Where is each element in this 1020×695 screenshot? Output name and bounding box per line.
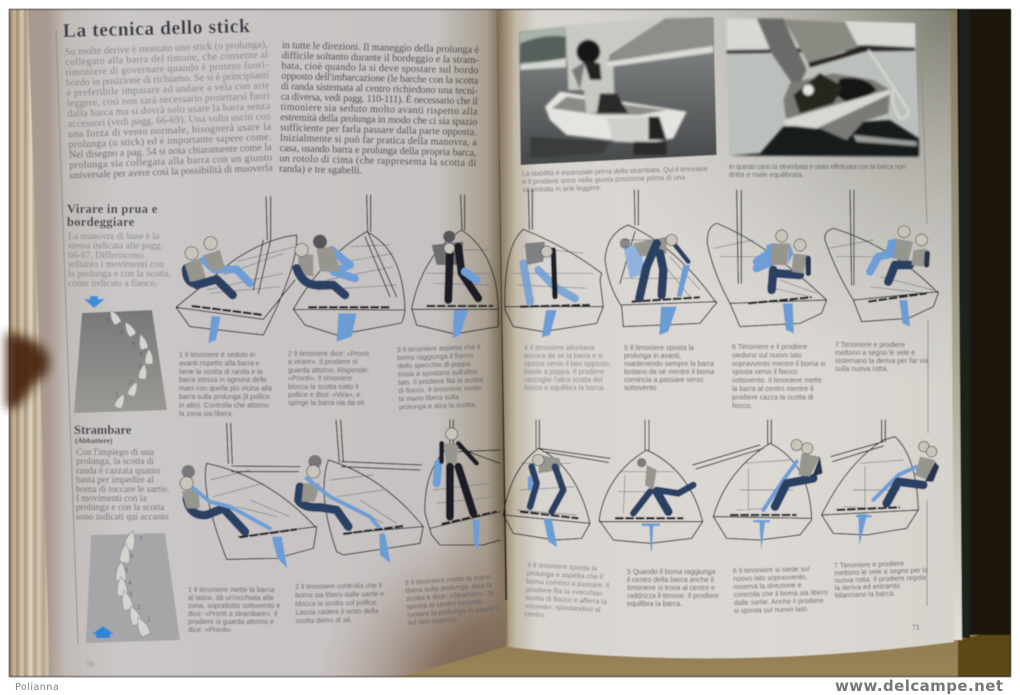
caption 3 lower: [405, 574, 500, 627]
caption 5 lower: timoniere si trova al centro e: [627, 585, 715, 592]
boat 3 lower left: [425, 420, 500, 551]
caption 5 lower: 5 Quando il boma raggiunga: [627, 569, 715, 576]
caption 1: [179, 352, 272, 418]
boat 6 lower right: [693, 420, 823, 551]
caption 6 lower: dalle sartie. Anche il prodiere: [734, 598, 824, 607]
caption 1 lower: [188, 587, 280, 634]
caption 6: sottovento. Il timoniere mette: [732, 378, 822, 385]
text block: virare: come indicato a fianco.: [68, 278, 158, 289]
text block: virare: la prolunga e con la scotta,: [68, 269, 171, 280]
caption 2 lower: 2 Il timoniere controlla che il: [295, 582, 382, 591]
photo 1 caption: strambata in arie leggere.: [522, 185, 602, 194]
boat 4 lower right: [503, 420, 610, 547]
photo 2: [726, 18, 919, 157]
caption 1: 1 Il timoniere è seduto in: [179, 352, 255, 359]
heading: Strambare: (Abbattere): [75, 436, 113, 445]
caption 3 lower: scotta e dice: «Strambo». Si: [406, 590, 494, 603]
gybe boats: 5: [125, 568, 129, 574]
caption 3: [397, 344, 484, 411]
photo 1: [519, 17, 717, 165]
caption 5: 5 Il timoniere sposta la: [624, 345, 694, 352]
title: La tecnica dello stick: [63, 16, 250, 42]
boat 6 top right: [707, 190, 827, 333]
caption 4: fiocco e equilibra la barca.: [524, 385, 605, 392]
text block: intro column 2: in tutte le direzioni. Il maneggio della prolunga è: [282, 40, 480, 56]
caption 5 lower: [627, 569, 719, 608]
caption 5: mantenendo sempre la barra: [624, 361, 714, 368]
diagram: tacking course: [74, 296, 167, 413]
tack boats: 1: [115, 393, 119, 399]
caption 2: pollice e dice: «Vira», e: [288, 392, 360, 399]
tack boats: [106, 308, 153, 409]
text block: strambare: boma di toccare le sartie.: [76, 485, 169, 495]
caption 3: dello specchio di poppa.: [397, 361, 473, 370]
caption 3 lower: ruotare la prolunga in avanti e: [407, 605, 500, 619]
text block: strambare: Con l'impiego di una: [76, 448, 154, 458]
caption 2 lower: blocca la scotta col pollice.: [295, 600, 378, 608]
text block: intro column 1: collegato alla barra del timone, che consente al: [65, 49, 269, 68]
icon: wind arrow down: [84, 296, 105, 308]
caption 2 lower: scotta dietro di sé.: [296, 617, 352, 625]
caption 6: sopravvento mentre il boma si: [732, 361, 826, 368]
caption 2: [288, 351, 369, 407]
diagram: gybing course: [86, 529, 180, 643]
text block: intro column 1: Nel disegno a pag. 54 si nota chiaramente come la: [69, 142, 272, 161]
caption 1: la zona sia libera.: [179, 411, 234, 418]
text block: virare: stessa indicata alle pagg.: [68, 240, 163, 251]
caption 2: a virare». Il prodiere si: [288, 359, 358, 366]
text block: intro column 2: un rotolo di cima (che rappresenta la scotta di: [279, 153, 477, 169]
text block: intro column 2: di randa sistemata al centro richiedono una tecni-: [281, 81, 479, 97]
caption 6 lower: nuovo lato sopravvento,: [733, 574, 808, 583]
caption 5: [624, 345, 714, 392]
caption 4 lower: boma cominci a passare. Il: [526, 578, 610, 590]
caption 5: sottovento.: [624, 385, 658, 392]
caption 7: sistemano la deriva per far via: [835, 358, 928, 365]
left page shading: [28, 10, 506, 676]
caption 3: 3 Il timoniere aspetta che il: [397, 344, 481, 354]
gybe boats: 7: [139, 537, 143, 543]
caption 7: [835, 342, 928, 373]
boat 2 top left: [293, 195, 405, 342]
text block: intro column 2: estremità della prolunga in modo che ci sia spazio: [280, 112, 477, 128]
text block: intro column 1: timoniere di governare quando è proteso fuori-: [65, 60, 269, 79]
left page margin rule: [56, 30, 78, 643]
gybe boats: [116, 529, 151, 637]
text block: intro column 2: bata, cioè quando la si deve spostare sul bordo: [281, 61, 479, 76]
caption 6 lower: si sposta sul nuovo lato.: [734, 606, 809, 615]
caption 2: guarda attorno. Risponde:: [288, 367, 369, 374]
text block: intro column 1: accessori (vedi pagg. 66-69). Una volta usciti con: [67, 111, 271, 130]
caption 1 lower: al lasco, dà un'occhiata alla: [188, 595, 273, 602]
caption 6: 6 Timoniere e il prodiere: [732, 344, 807, 351]
caption 6 lower: 6 Il timoniere si siede sul: [733, 566, 810, 575]
caption 2: spinge la barra via da sé.: [288, 400, 366, 407]
caption 2 lower: Lascia cadere il resto della: [295, 608, 378, 616]
caption 3: lato. Il prodiere fila la scotta: [398, 377, 483, 387]
caption 3 lower: sul lato opposto.: [407, 616, 459, 627]
caption 2: «Pronti». Il timoniere: [288, 376, 352, 383]
text block: intro column 2: timoniere sia seduto molto avanti rispetto alla: [280, 102, 478, 118]
page number 71: 71: [912, 623, 920, 632]
caption 4 lower: «nuova», spostandosi al: [525, 603, 601, 614]
caption 4 lower: 4 Il timoniere sposta la: [527, 562, 597, 573]
caption 1 lower: dice: «Pronti a strambare». Il: [188, 611, 278, 618]
text block: intro column 2: casa, usando barra e prolunga della propria barca,: [279, 143, 477, 159]
caption 1: in alto). Controlla che attorno: [179, 402, 269, 409]
caption 7 lower: nuova rotta. Il prodiere regola: [834, 575, 926, 585]
caption 7: sulla nuova rotta.: [835, 366, 888, 373]
caption 3: Inizia a spostarsi sull'altro: [398, 369, 478, 379]
caption 2: blocca la scotta sotto il: [288, 384, 359, 391]
right page shading: [497, 10, 954, 658]
text block: intro column 1: una forza di vento normale, bisognerà usare la: [68, 122, 272, 140]
caption 7 lower: la deriva ed entrambi: [835, 583, 901, 592]
caption 1: barra stessa in ognuna delle: [179, 377, 267, 384]
heading: Virare in prua e bordeggiare: [67, 202, 158, 229]
heading: Strambare: [74, 423, 132, 445]
caption 5 lower: equilibra la barca.: [627, 601, 682, 608]
caption 4: [524, 345, 611, 392]
text block: intro column 1: dalla barca ma si dovrà solo usare la barra senza: [67, 101, 271, 120]
caption 4 lower: scotta di fiocco e afferra la: [525, 595, 607, 606]
text block: virare: [68, 231, 171, 289]
caption 4: 4 Il timoniere allontana: [524, 345, 595, 352]
text block: intro column 2: randa) e tre sgabelli.: [279, 164, 362, 177]
text block: intro column 1: prolunga sia collegata alla barra con un giunto: [69, 152, 272, 171]
caption 1 lower: 1 Il timoniere mette la barca: [188, 587, 274, 594]
text block: intro column 1: bordo in posizione di richiamo. Se si è principianti: [66, 70, 269, 89]
page number 70: 70: [86, 660, 94, 669]
photo 1 caption: [522, 166, 709, 194]
heading: Virare in prua e bordeggiare: Virare in prua e: [67, 202, 158, 216]
boat 1 lower left: [180, 423, 317, 568]
caption 6 lower: osserva la direzione e: [733, 582, 802, 591]
caption 6: sposta verso il fianco: [732, 369, 797, 376]
boat 2 lower left: [298, 420, 423, 563]
tack boats: 7: [106, 319, 110, 325]
photo 2 caption: In questo caso la strambata è stata effettuata con la barca non: [729, 164, 906, 171]
text block: strambare: [76, 448, 169, 522]
text block: intro column 1: Su molte derive è montato uno stick (o prolunga),: [65, 39, 268, 58]
caption 1 lower: prodiere si guarda attorno e: [188, 619, 274, 626]
text block: strambare: prolunga, la scotta di: [76, 457, 154, 467]
caption 4: ancora da sé la barra e si: [524, 353, 603, 360]
text block: intro column 1: leggere, così non sarà necessario proiettarsi fuori: [67, 91, 270, 109]
caption 4 lower: centro.: [524, 611, 546, 619]
photo 2 caption: dritta e male equilibrata.: [729, 172, 804, 179]
text block: virare: soltanto i movimenti con: [68, 259, 164, 270]
caption 3 lower: sposta al centro facendo: [406, 599, 483, 611]
caption 6: fiocco.: [732, 403, 752, 410]
caption 7 lower: bilanciano la barca.: [835, 590, 895, 600]
caption 6: [732, 344, 826, 410]
photo 1 caption: e il prodiere sono nella giusta posizione prima di una: [522, 174, 685, 186]
text block: intro column 1: prolunga (o stick) ed è importante sapere come.: [68, 132, 272, 151]
caption 3: prolunga e alza la scotta.: [399, 402, 477, 411]
caption 2 lower: [295, 582, 385, 625]
caption 1: mani con quella più vicina alla: [179, 386, 272, 393]
caption 1: tiene la scotta di randa e la: [179, 369, 263, 376]
caption 4 lower: [524, 562, 611, 623]
boat 4 top right: [505, 190, 603, 337]
caption 4 lower: prolunga e aspetta che il: [526, 570, 603, 581]
text block: strambare: randa è cazzata quanto: [76, 466, 161, 476]
right page margin rule: [920, 27, 928, 606]
text block: intro column 1: universale per avere così la possibilità di muoverla: [69, 163, 273, 182]
page edge stack: [10, 10, 50, 676]
boat 5 lower right: [599, 420, 703, 551]
gybe boats: 1: [147, 617, 151, 623]
caption 7 lower: [834, 560, 929, 600]
boat 3 top left: [412, 195, 498, 338]
caption 1: barra sulla prolunga (il pollice: [179, 394, 270, 401]
tack boats: 3: [138, 364, 142, 370]
caption 1 lower: dice: «Pronti».: [188, 627, 233, 634]
caption 7: 7 Timoniere e prodiere: [835, 342, 905, 349]
caption 5: lontano da sé mentre il boma: [624, 369, 714, 376]
caption 3 lower: libera sulla prolunga, alza la: [405, 582, 492, 595]
tack boats: 4: [139, 352, 143, 358]
gybe boats: 3: [129, 592, 133, 598]
tack boats: 6: [120, 331, 124, 337]
caption 4: sposta verso il lato opposto,: [524, 361, 611, 368]
watermark right: www.delcampe.net: [835, 677, 1003, 695]
text block: intro column 1: [65, 39, 273, 182]
caption 6 lower: [733, 566, 828, 615]
photo 2 caption: [729, 164, 906, 179]
caption 4 lower: prodiere fila la «vecchia»: [526, 587, 603, 598]
caption 2 lower: boma sia libero dalle sartie e: [295, 591, 384, 599]
boat 1 top left: [176, 197, 297, 343]
boat 7 lower right: [822, 420, 939, 545]
thumb: [6, 333, 49, 408]
caption 3 lower: 3 Il timoniere mette la mano: [405, 574, 491, 587]
caption 5: comincia a passare verso: [624, 377, 703, 384]
caption 3: di fiocco. Il timoniere mette: [398, 385, 482, 395]
heading: Virare in prua e bordeggiare: bordeggiare: [67, 215, 135, 229]
left page: [28, 10, 506, 676]
watermark left: Polianna: [15, 682, 59, 693]
caption 7: mettono a segno le vele e: [835, 350, 915, 357]
caption 1 lower: zona, soprattutto sottovento e: [188, 603, 280, 610]
caption 6 lower: controlla che il boma sia libero: [733, 590, 828, 599]
text block: intro column 1: è preferibile imparare ad andare a vela con arie: [66, 80, 270, 99]
text block: strambare: basta per impedire al: [76, 476, 154, 486]
caption 6: siedono sul nuovo lato: [732, 352, 802, 359]
text block: intro column 2: ca diversa, vedi pagg. 110-111). È necessario che il: [281, 90, 478, 107]
caption 4: fronte a poppa. Il prodiere: [524, 369, 604, 376]
right page: [497, 10, 954, 658]
boat 7 top right: [825, 190, 938, 327]
heading: Strambare: Strambare: [74, 423, 132, 437]
text block: virare: La manovra di base è la: [68, 231, 160, 242]
text block: strambare: I movimenti con la: [76, 494, 146, 504]
text block: intro column 2: [279, 40, 480, 179]
text block: intro column 2: sufficiente per farla passare dalla parte opposta.: [280, 122, 477, 138]
caption 1: avanti rispetto alla barra e: [179, 360, 260, 367]
caption 3: boma raggiunga il fianco: [397, 353, 474, 362]
caption 7 lower: 7 Timoniere e prodiere: [834, 561, 904, 570]
caption 6: la barra al centro mentre il: [732, 386, 814, 393]
gybe boats: 4: [128, 581, 132, 587]
caption 5 lower: raddrizza il timone. Il prodiere: [627, 593, 719, 600]
tack boats: 2: [129, 380, 133, 386]
text block: virare: 66-67. Differiscono: [68, 250, 144, 261]
icon: wind arrow up: [92, 626, 114, 638]
tack boats: 5: [132, 342, 136, 348]
caption 2: 2 Il timoniere dice: «Pronti: [288, 351, 369, 358]
photo 1 caption: La stabilità è essenziale prima della strambata. Qui il timoniere: [522, 166, 708, 178]
text block: strambare: prolunga e con la scotta: [76, 503, 164, 513]
boat 5 top right: [605, 190, 717, 335]
caption 3: la mano libera sulla: [399, 394, 459, 403]
caption 4: raccoglie l'altra scotta del: [524, 377, 603, 384]
caption 5 lower: il centro della barca anche il: [627, 577, 714, 584]
caption 7 lower: mettono le vele a segno per la: [834, 567, 928, 577]
caption 6: prodiere cazza la scotta di: [732, 394, 814, 401]
caption 5: prolunga in avanti,: [624, 353, 681, 360]
gybe boats: 6: [130, 554, 134, 560]
text block: intro column 2: difficile soltanto durante il bordeggio e la stram-: [282, 50, 479, 66]
text block: strambare: sono indicati qui accanto: [76, 512, 169, 522]
text block: intro column 2: opposto dell'imbarcazione (le barche con la scotta: [281, 71, 479, 87]
text block: intro column 2: Inizialmente si può far pratica della manovra, a: [280, 133, 477, 148]
gybe boats: 2: [137, 605, 141, 611]
